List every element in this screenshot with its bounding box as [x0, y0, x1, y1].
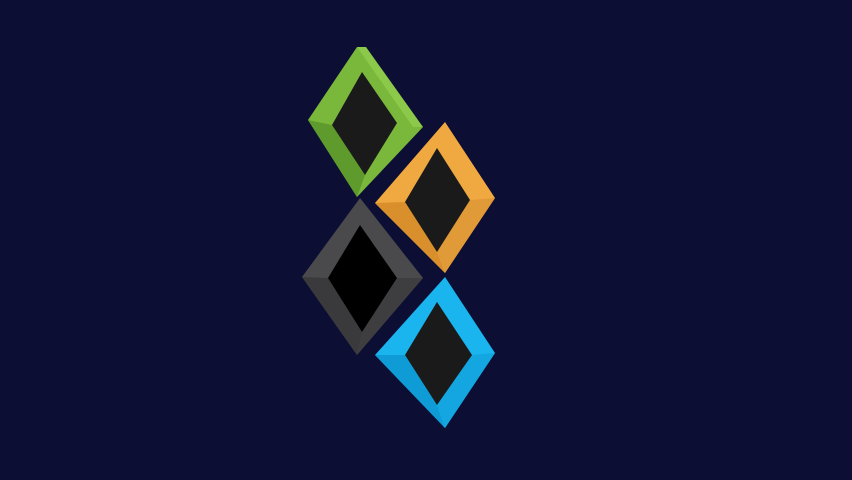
- diamond: gray: [302, 198, 423, 355]
- diamond: green: [308, 47, 423, 197]
- diamond: orange: [375, 122, 495, 273]
- diamond: blue: [375, 277, 495, 428]
